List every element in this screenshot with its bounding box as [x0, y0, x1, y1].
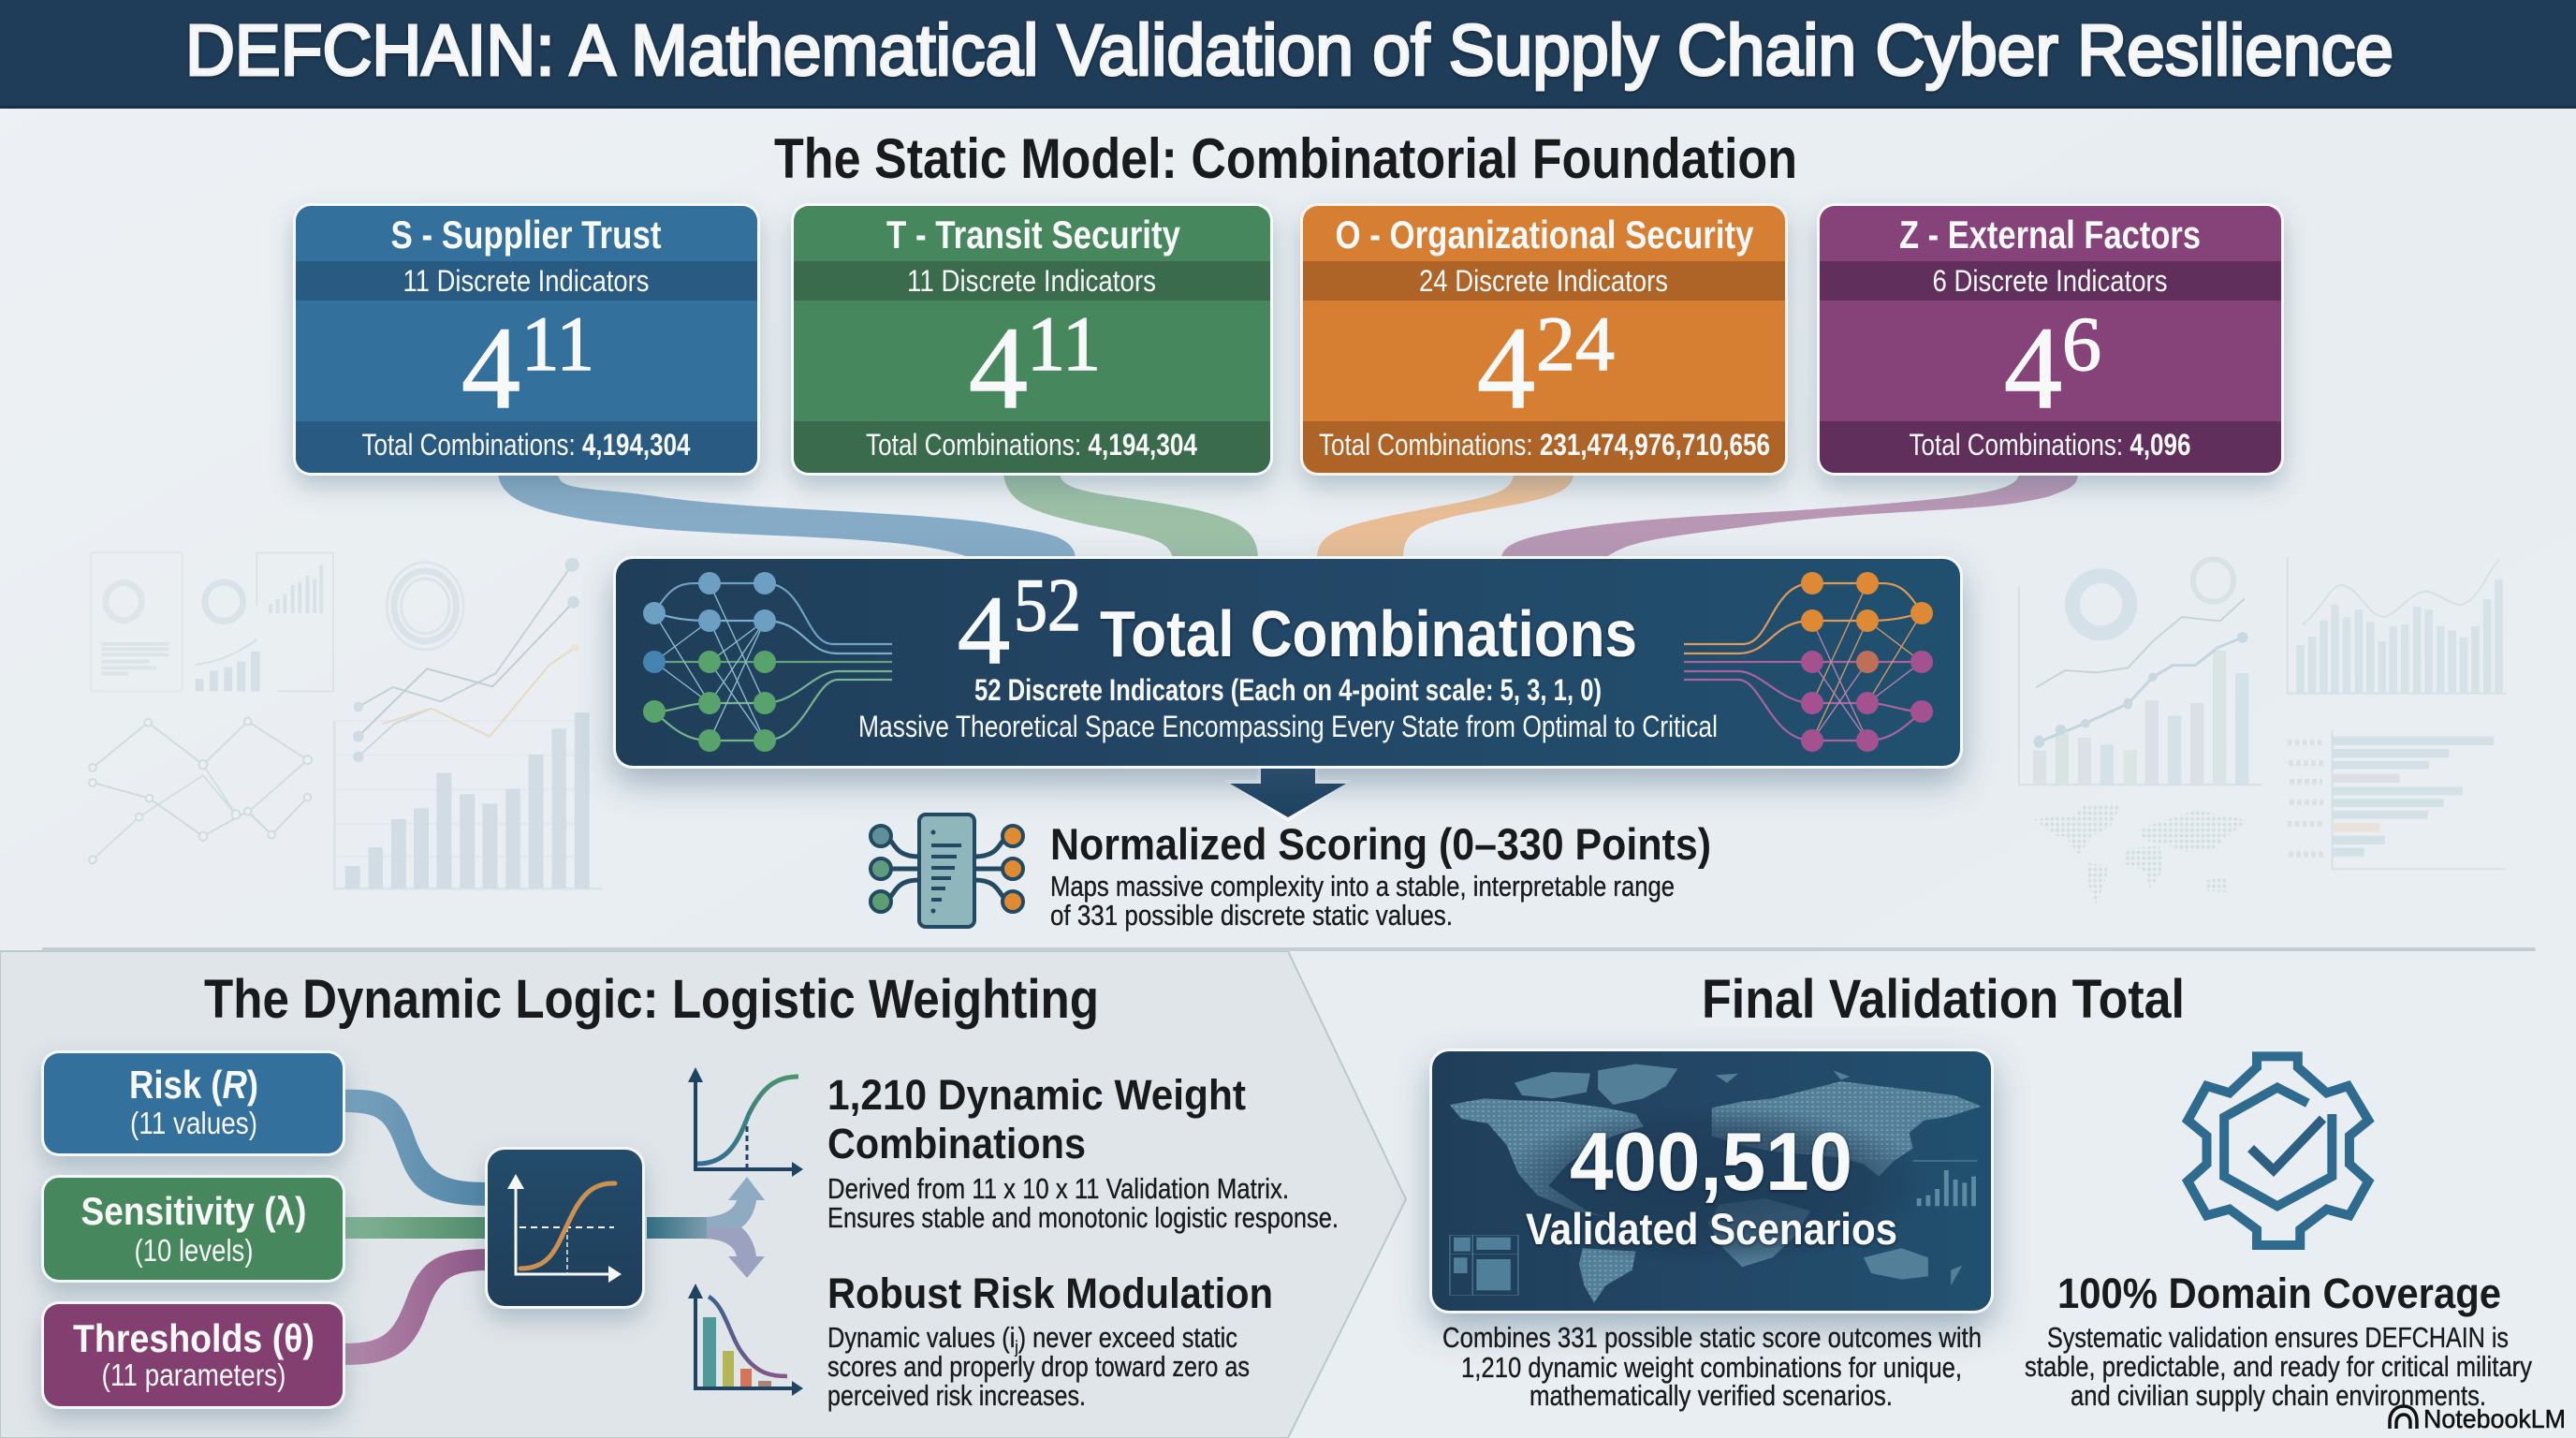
- indicator count: 6 Discrete Indicators: [1932, 264, 2168, 298]
- card title: S - Supplier Trust: [391, 213, 662, 257]
- icon: s-curve chart: [688, 1067, 803, 1177]
- indicator count: 24 Discrete Indicators: [1419, 264, 1668, 298]
- formula 4^52: [958, 565, 1081, 684]
- input box: risk: (11 values): [130, 1106, 257, 1140]
- exponent formula: 11: [1027, 301, 1101, 387]
- exponent formula: 4: [2004, 304, 2062, 433]
- total combinations label: Total Combinations: [1100, 597, 1637, 670]
- text block: combines description: Combines 331 possible static score outcomes with: [1442, 1321, 1982, 1354]
- normalized scoring body: [1050, 870, 1675, 932]
- body: and civilian supply chain environments.: [2071, 1379, 2486, 1412]
- input box: thresholds: (11 parameters): [101, 1357, 286, 1392]
- card: Z external factors: [1817, 203, 2284, 476]
- input box: thresholds: Thresholds (θ): [73, 1316, 315, 1360]
- input ribbons: [343, 1090, 491, 1365]
- title: DEFCHAIN: A Mathematical Validation of Supply Chain Cyber Resilience: [185, 10, 2393, 91]
- panel: validated scenarios map: [1429, 1049, 1994, 1313]
- exponent formula: 11: [521, 301, 594, 387]
- body: Derived from 11 x 10 x 11 Validation Matrix.: [827, 1172, 1289, 1205]
- subheading: Combinations: [827, 1120, 1086, 1167]
- heading: static model: The Static Model: Combinatorial Foundation: [774, 127, 1797, 190]
- normalized scoring body: of 331 possible discrete static values.: [1050, 899, 1453, 932]
- input box: thresholds: [41, 1301, 345, 1409]
- indicator count: 11 Discrete Indicators: [907, 264, 1156, 298]
- neural network left: [643, 572, 892, 752]
- card: O organizational security: [1300, 203, 1788, 476]
- exponent formula: 24: [1536, 301, 1615, 387]
- exponent formula: 6: [2062, 301, 2101, 387]
- body: never exceed static: [1034, 1321, 1284, 1354]
- icon: logistic function box: [485, 1147, 645, 1309]
- faint background charts right: [2019, 557, 2506, 905]
- text block: combines description: 1,210 dynamic weight combinations for unique,: [1461, 1351, 1962, 1384]
- ribbon: organizational security: [1317, 473, 1573, 559]
- faint background charts left: [89, 552, 602, 888]
- subheading: [827, 1071, 1246, 1167]
- exponent formula: [1477, 301, 1615, 433]
- panel: total combinations: [613, 556, 1963, 769]
- watermark: NotebookLM: NotebookLM: [2423, 1404, 2566, 1433]
- scenario count: 400,510: [1570, 1115, 1852, 1208]
- total combinations: Total Combinations: 231,474,976,710,656: [1319, 428, 1770, 462]
- icon: gear with shield check: [2188, 1056, 2368, 1245]
- subheading: 1,210 Dynamic Weight: [827, 1071, 1246, 1119]
- card: T transit security: [791, 203, 1273, 476]
- input box: risk: [41, 1050, 345, 1156]
- heading: dynamic logic: The Dynamic Logic: Logistic Weighting: [204, 969, 1099, 1030]
- scenario label: Validated Scenarios: [1526, 1204, 1897, 1254]
- neural network right: [1684, 572, 1933, 752]
- exponent formula: 4: [1477, 304, 1535, 433]
- body: Dynamic values (i: [827, 1321, 1057, 1354]
- text block: dynamic weight combinations: [827, 1071, 1339, 1234]
- exponent formula: [969, 301, 1101, 433]
- card title: O - Organizational Security: [1335, 213, 1754, 257]
- ribbon: external factors: [1501, 473, 2078, 559]
- subheading: 100% Domain Coverage: [2057, 1269, 2501, 1317]
- input box: risk: Risk (R): [129, 1063, 258, 1107]
- ribbon: transit security: [1003, 473, 1258, 559]
- body: [827, 1172, 1339, 1234]
- text block: combines description: mathematically verified scenarios.: [1530, 1379, 1893, 1412]
- header band: [0, 0, 2576, 109]
- panel: dynamic logic background: [0, 951, 1406, 1438]
- small map panel: [1450, 1235, 1518, 1295]
- exponent formula: 4: [969, 304, 1028, 433]
- formula 4^52: 4: [958, 577, 1010, 684]
- arrow: total to normalized scoring: [1224, 763, 1352, 822]
- indicator count: 11 Discrete Indicators: [402, 264, 650, 298]
- input box: sensitivity: (10 levels): [135, 1233, 253, 1268]
- exponent formula: [2004, 301, 2101, 433]
- body: perceived risk increases.: [827, 1379, 1086, 1412]
- body: scores and properly drop toward zero as: [827, 1350, 1250, 1383]
- input box: sensitivity: [41, 1175, 345, 1283]
- small bar panel: [1913, 1161, 1978, 1206]
- body: [827, 1321, 1250, 1412]
- body: ): [1018, 1321, 1026, 1354]
- ribbon: supplier trust: [498, 473, 1076, 559]
- icon: decay chart with bars: [688, 1284, 803, 1396]
- icon: normalized scoring server: [871, 814, 1023, 927]
- total combinations: Total Combinations: 4,194,304: [361, 428, 691, 462]
- total combinations: Total Combinations: 4,194,304: [866, 428, 1197, 462]
- normalized scoring text: [1050, 819, 1711, 932]
- body: Ensures stable and monotonic logistic response.: [827, 1201, 1339, 1234]
- text block: combines description: [1442, 1321, 1982, 1412]
- subheading: Robust Risk Modulation: [827, 1269, 1273, 1317]
- text block: robust risk modulation: [827, 1269, 1273, 1412]
- normalized scoring heading: Normalized Scoring (0–330 Points): [1050, 819, 1711, 869]
- body: j: [1015, 1338, 1018, 1357]
- indicators line: 52 Discrete Indicators (Each on 4-point scale: 5, 3, 1, 0): [974, 673, 1602, 707]
- exponent formula: [461, 301, 594, 433]
- world map: [1450, 1064, 1982, 1303]
- card title: T - Transit Security: [886, 213, 1181, 257]
- heading: final validation: Final Validation Total: [1702, 969, 2185, 1030]
- connector ribbons from cards to total: [498, 473, 2078, 559]
- total combinations: Total Combinations: 4,096: [1910, 428, 2190, 462]
- formula 4^52: 52: [1014, 565, 1081, 647]
- body: [2025, 1321, 2532, 1412]
- card title: Z - External Factors: [1899, 213, 2201, 257]
- normalized scoring body: Maps massive complexity into a stable, interpretable range: [1050, 870, 1675, 902]
- input box: sensitivity: Sensitivity (λ): [80, 1189, 307, 1233]
- card: S supplier trust: [293, 203, 760, 476]
- description line: Massive Theoretical Space Encompassing Every State from Optimal to Critical: [858, 710, 1718, 743]
- arrow: split output: [647, 1177, 765, 1278]
- exponent formula: 4: [461, 304, 520, 433]
- text block: domain coverage: [2025, 1269, 2532, 1412]
